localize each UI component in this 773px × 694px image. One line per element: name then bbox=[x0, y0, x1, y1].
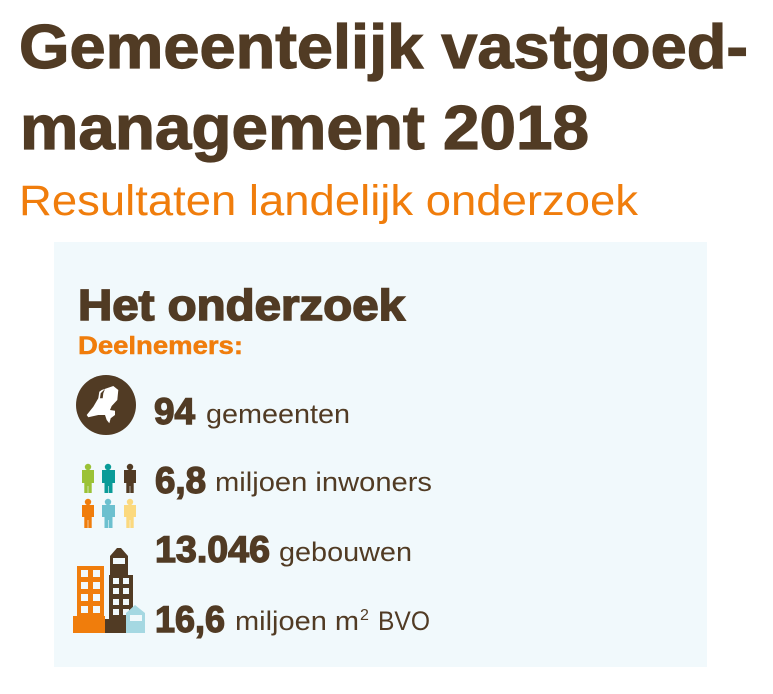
icon: people bbox=[82, 464, 136, 528]
stat: 16,6 miljoen m2 BVO: 16,6 bbox=[155, 599, 225, 640]
stat: 94 gemeenten: 94 bbox=[154, 391, 195, 432]
person: green bbox=[82, 464, 94, 493]
stat: 13.046 gebouwen: 13.046 bbox=[155, 529, 270, 570]
stat: 6,8 miljoen inwoners bbox=[155, 460, 432, 501]
icon: netherlands map bbox=[76, 375, 136, 435]
title bbox=[19, 13, 748, 163]
title: Gemeentelijk vastgoed- bbox=[19, 13, 748, 82]
panel: het onderzoek bbox=[54, 242, 707, 667]
panel heading: Het onderzoek bbox=[78, 281, 406, 330]
title: management 2018 bbox=[20, 94, 589, 163]
subtitle: Resultaten landelijk onderzoek bbox=[19, 177, 639, 225]
stat: 16,6 miljoen m2 BVO bbox=[155, 599, 430, 640]
icon: buildings bbox=[73, 548, 145, 633]
person: light blue bbox=[102, 499, 115, 528]
stat: 16,6 miljoen m2 BVO: miljoen m bbox=[235, 606, 359, 636]
person: yellow bbox=[124, 499, 136, 528]
stat: 13.046 gebouwen: gebouwen bbox=[279, 537, 412, 567]
stat: 6,8 miljoen inwoners: 6,8 bbox=[155, 460, 206, 501]
stat: 16,6 miljoen m2 BVO: BVO bbox=[378, 606, 430, 636]
stat: 6,8 miljoen inwoners: miljoen inwoners bbox=[215, 467, 432, 497]
person: teal bbox=[102, 464, 115, 493]
section label: deelnemers: Deelnemers: bbox=[78, 332, 243, 360]
person: orange bbox=[82, 499, 94, 528]
stat: 13.046 gebouwen bbox=[155, 529, 412, 570]
stat: 94 gemeenten: gemeenten bbox=[206, 399, 350, 429]
small house bbox=[126, 605, 145, 633]
stat: 94 gemeenten bbox=[154, 391, 350, 432]
person: brown bbox=[124, 464, 136, 493]
brown tower bbox=[105, 548, 133, 633]
stat: 16,6 miljoen m2 BVO: 2 bbox=[360, 607, 369, 624]
orange tower bbox=[73, 566, 105, 633]
